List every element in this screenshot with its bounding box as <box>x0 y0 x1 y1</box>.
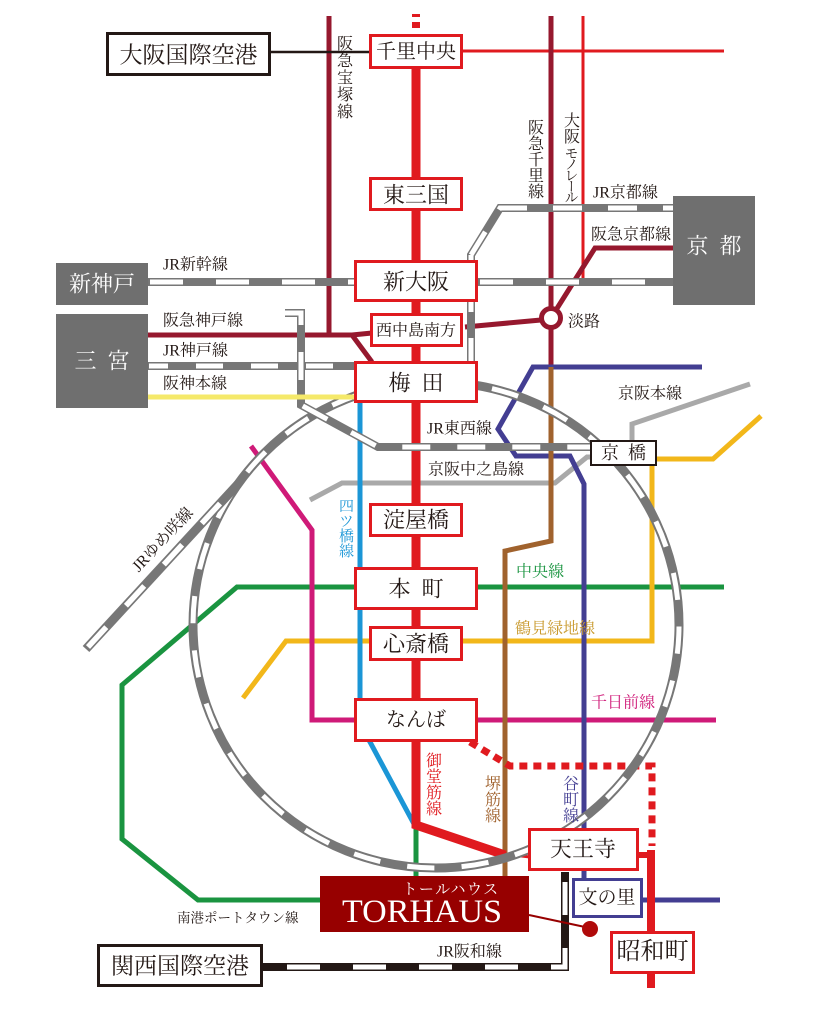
station: Showacho <box>612 932 694 972</box>
label: Keihan main: 京阪本線 <box>618 384 682 402</box>
line: Keihan Nakanoshima <box>310 457 600 500</box>
station: Namba <box>356 700 476 740</box>
station: Osaka Airport: 大阪国際空港 <box>120 42 258 68</box>
station: Kyobashi: 京 橋 <box>601 443 646 463</box>
station: Sannomiya: 三 宮 <box>74 348 130 374</box>
station: Shin-Kobe: 新神戸 <box>69 272 135 296</box>
label: Sennichimae: 千日前線 <box>591 694 655 712</box>
label: Yotsubashi: 四ツ橋線 <box>337 498 354 558</box>
station: Honmachi <box>356 568 476 608</box>
label: Tanimachi: 谷町線 <box>560 775 578 823</box>
station: Osaka Airport <box>108 34 270 74</box>
label: Awaji: 淡路 <box>568 312 600 330</box>
station: Kyoto: 京 都 <box>686 234 742 258</box>
station: Kyoto <box>673 196 755 305</box>
line: Nagahori Tsurumi-ryokuchi <box>243 416 761 698</box>
line: Hankyu Senri <box>548 16 554 367</box>
line: Sennichimae <box>251 446 716 720</box>
station: Sannomiya <box>56 314 148 408</box>
station: Senri-Chuo <box>370 36 462 68</box>
line: Midosuji to Showacho <box>638 850 651 988</box>
callout: TORHAUS: TORHAUS <box>342 894 502 930</box>
station: Namba: なんば <box>386 708 446 731</box>
line: Chuo <box>122 587 724 900</box>
station: Yodoyabashi <box>370 504 462 536</box>
line: JR Hanwa <box>262 872 565 967</box>
station: Shin-Osaka <box>356 262 476 300</box>
station: Shinsaibashi: 心斎橋 <box>383 632 449 656</box>
label: Keihan Nakanoshima: 京阪中之島線 <box>428 460 524 478</box>
label: JR Kyoto: JR京都線 <box>593 184 658 202</box>
station: Yodoyabashi: 淀屋橋 <box>383 508 449 532</box>
station: Honmachi: 本 町 <box>388 576 444 602</box>
line: JR Shinkansen <box>148 278 673 286</box>
label: Osaka Monorail: モノレール <box>562 146 578 203</box>
line: Hankyu Kobe <box>148 248 673 362</box>
line: Osaka Monorail <box>463 16 724 280</box>
station: Higashi-Mikuni <box>370 178 462 210</box>
label: JR Hanwa: JR阪和線 <box>437 942 502 960</box>
label: Hankyu Senri: 阪急千里線 <box>526 119 544 199</box>
label: Hankyu Kobe: 阪急神戸線 <box>163 312 243 330</box>
line: JR Yumesaki <box>86 484 238 649</box>
station: Nishinakajima-Minamigata <box>372 314 462 346</box>
callout: TORHAUS: トールハウス <box>402 882 500 898</box>
line: Yotsubashi <box>360 403 414 824</box>
line: Tanimachi <box>498 367 720 900</box>
station: Fuminosato <box>574 880 642 916</box>
label: JR Shinkansen: JR新幹線 <box>163 256 228 274</box>
station: Fuminosato: 文の里 <box>578 886 636 908</box>
station: Umeda: 梅 田 <box>388 370 444 396</box>
label: Midosuji: 御堂筋線 <box>424 752 442 816</box>
label: Nanko Port Town: 南港ポートタウン線 <box>177 910 299 926</box>
station: Shin-Kobe <box>56 263 148 305</box>
line: Midosuji <box>416 14 530 857</box>
station: Nishinakajima-Minamigata: 西中島南方 <box>376 322 456 340</box>
line: JR Tozai <box>285 313 592 447</box>
line: JR Kyoto <box>471 208 673 372</box>
line: JR Kobe <box>148 362 356 370</box>
line: Hankyu Takarazuka <box>326 16 332 335</box>
line: Hanshin <box>148 394 356 400</box>
station: Senri-Chuo: 千里中央 <box>376 40 456 63</box>
station: Kyobashi <box>591 441 656 465</box>
label: Osaka Monorail <box>562 112 580 203</box>
station: Kansai Airport: 関西国際空港 <box>111 954 249 978</box>
marker: TORHAUS location <box>529 915 598 937</box>
label: Hankyu Takarazuka: 阪急宝塚線 <box>334 35 352 120</box>
label: Sakaisuji: 堺筋線 <box>482 775 500 823</box>
line: Keihan main <box>632 384 750 442</box>
label: Hanshin: 阪神本線 <box>163 374 227 392</box>
station: Umeda <box>356 362 476 402</box>
label: Osaka Monorail: 大阪 <box>562 112 580 144</box>
line: airport connector <box>271 51 370 53</box>
line: Sakaisuji <box>505 367 551 880</box>
station: Tennoji: 天王寺 <box>550 836 616 862</box>
station: Showacho: 昭和町 <box>616 938 688 965</box>
label: JR Kobe: JR神戸線 <box>163 342 228 360</box>
station: Awaji circle <box>542 308 560 328</box>
station: Higashi-Mikuni: 東三国 <box>383 182 449 208</box>
station: Shin-Osaka: 新大阪 <box>383 270 449 294</box>
station: Kansai Airport <box>98 946 262 986</box>
label: Nagahori Tsurumi-ryokuchi: 鶴見緑地線 <box>515 618 595 638</box>
line: JR loop <box>193 382 679 868</box>
station: Shinsaibashi <box>370 628 462 660</box>
station: Tennoji <box>530 830 638 870</box>
label: JR Yumesaki: JRゆめ咲線 <box>128 504 197 575</box>
label: Chuo: 中央線 <box>516 562 564 580</box>
line: dotted Midosuji extension <box>470 742 652 846</box>
label: JR Tozai: JR東西線 <box>427 420 492 438</box>
callout: TORHAUS <box>320 876 529 932</box>
label: Hankyu Kyoto: 阪急京都線 <box>591 226 671 244</box>
